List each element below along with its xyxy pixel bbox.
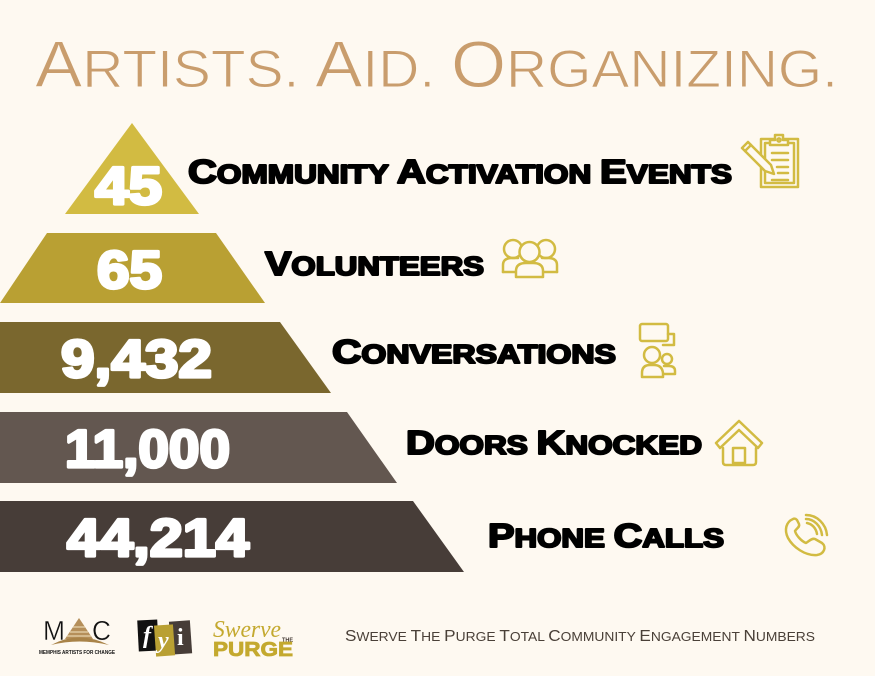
pyramid tier: 44,214: [0, 501, 464, 572]
pyramid tier: 44,214: 44,214: [67, 509, 250, 568]
label: phone calls: PHONE CALLS: [488, 517, 724, 554]
pyramid tier: 45: [65, 123, 199, 216]
label: volunteers: VOLUNTEERS: [265, 245, 484, 282]
icon: clipboard and pencil: [742, 135, 798, 187]
caption: SWERVE THE PURGE TOTAL COMMUNITY ENGAGEMENT NUMBERS: [345, 628, 815, 645]
label: doors knocked: DOORS KNOCKED: [406, 424, 702, 461]
icon: conversation: [640, 324, 675, 377]
title: ARTISTS. AID. ORGANIZING.: [35, 27, 838, 101]
pyramid tier: 11,000: 11,000: [65, 420, 230, 479]
pyramid tier: 65: [0, 233, 265, 303]
logo: Memphis Artists For Change: [39, 615, 116, 656]
icon: house: [716, 421, 762, 465]
pyramid tier: 65: 65: [97, 241, 162, 300]
logo: Swerve the Purge: [213, 617, 293, 661]
logo: Memphis Artists For Change: M: [43, 615, 65, 646]
logo: Swerve the Purge: THE: [282, 638, 293, 644]
pyramid tier: 11,000: [0, 412, 397, 483]
pyramid tier: 9,432: [0, 322, 331, 393]
logo: fyi: [137, 619, 192, 657]
logo: Memphis Artists For Change: MEMPHIS ARTISTS FOR CHANGE: [39, 650, 116, 656]
pyramid tier: 45: 45: [95, 157, 162, 216]
icon: phone: [786, 515, 827, 555]
logo: fyi: y: [155, 628, 169, 654]
logo: fyi: i: [177, 625, 184, 651]
label: community activation events: COMMUNITY ACTIVATION EVENTS: [188, 153, 732, 190]
logo: fyi: f: [143, 623, 153, 649]
label: conversations: CONVERSATIONS: [332, 333, 616, 370]
logo: Swerve the Purge: PURGE: [213, 639, 293, 661]
logo: Memphis Artists For Change: C: [92, 615, 111, 646]
pyramid tier: 9,432: 9,432: [61, 330, 212, 389]
logo: Swerve the Purge: Swerve: [213, 617, 281, 643]
icon: volunteers group: [503, 240, 557, 277]
